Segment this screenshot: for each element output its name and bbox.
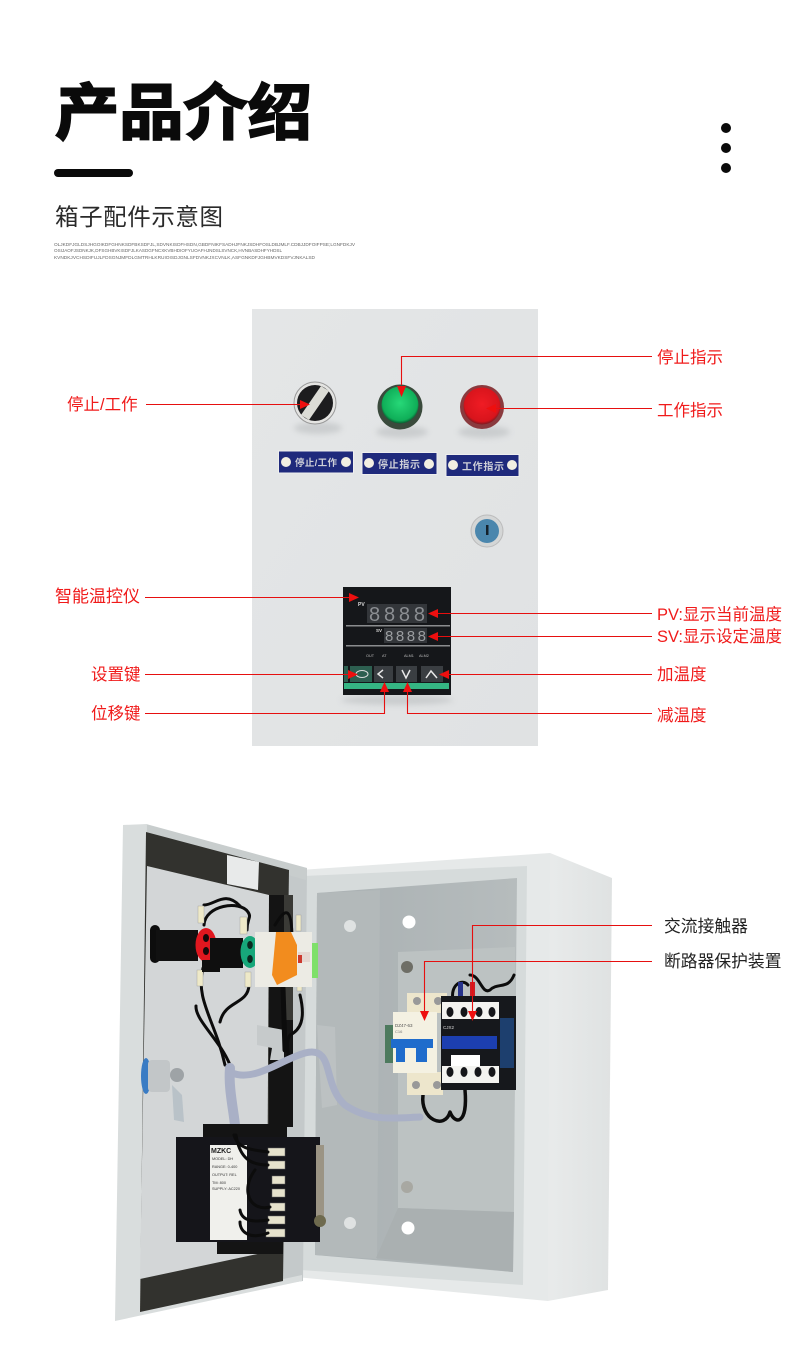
nameplate: work indicator: 工作指示	[462, 460, 504, 473]
temperature controller: ALM1	[404, 654, 414, 658]
cam lock	[141, 1058, 184, 1122]
circuit breaker	[385, 993, 447, 1095]
menu dots icon	[721, 123, 731, 173]
small placeholder text: OLJKDFJGLDSJHGOIKDFGHNKSDFBKSDFJL,SDVNKISDFHSDN,GBDFNIKFSADHJFNKJSDHFOSLDBJMLF.CDBJJDFOIFPSE;LGNFDKJV	[54, 242, 356, 247]
icon: selector switch	[294, 382, 336, 424]
label: set key: 设置键	[91, 665, 140, 684]
label: work indicator	[486, 401, 723, 420]
door bracket	[257, 1025, 284, 1060]
small placeholder text: OSIJAOFJSDNKJK,DFSGHBVKISDFJLKASDGFNCXKVBHDIOFYUOAFHJNDSLSVNCK,HVNBASDHFYHDSL	[54, 248, 282, 253]
nameplate: stop/work: 停止/工作	[295, 457, 337, 469]
label: decrease temperature	[403, 682, 706, 725]
wire sleeves	[197, 906, 302, 991]
label: circuit breaker	[420, 952, 781, 1021]
temperature controller: PV	[358, 602, 365, 608]
door black channel	[269, 895, 293, 1127]
temperature controller: SV	[376, 628, 382, 633]
panel: control panel front	[252, 309, 538, 746]
door gasket	[140, 832, 289, 1312]
label: AC contactor	[468, 917, 748, 1021]
icon: green indicator	[378, 384, 422, 430]
enclosure photo	[296, 853, 612, 1301]
icon: red indicator	[460, 385, 504, 429]
label: stop indicator: 停止指示	[657, 348, 723, 367]
label: SV: SV:显示设定温度	[657, 627, 782, 646]
box side	[523, 853, 612, 1301]
label: PV	[428, 605, 782, 624]
label: work indicator: 工作指示	[657, 401, 723, 420]
label: decrease temperature: 减温度	[657, 706, 706, 725]
tape patch	[227, 855, 259, 890]
subtitle: 箱子配件示意图	[55, 204, 223, 230]
label: smart controller	[55, 587, 359, 606]
door rim backing	[282, 866, 307, 1284]
door inner plate	[140, 866, 269, 1279]
small placeholder text: KVNDKJVCHSDIFUJLFDSGNJMFDLGMTRHLKRUIOISDJGNLSFDVNKJXCVNLK,ASFGNKDFJGHBMVKDSFVJNKALSD	[54, 255, 316, 260]
rear controller unit: MODEL: DH	[212, 1157, 233, 1161]
terminals	[266, 1148, 285, 1237]
label: circuit breaker: 断路器保护装置	[664, 952, 781, 971]
small placeholder text	[54, 242, 356, 260]
label: stop/work	[67, 395, 310, 414]
label: increase temperature	[439, 665, 706, 684]
rear controller unit: OUTPUT: REL	[212, 1173, 237, 1177]
temperature controller	[343, 587, 451, 695]
circuit breaker: C16	[395, 1029, 403, 1034]
controller buttons	[344, 666, 443, 682]
pilot lamps	[150, 925, 260, 972]
temperature controller: OUT	[366, 654, 375, 658]
wires at contactor	[423, 975, 514, 1121]
rear controller unit: TM: 800	[212, 1181, 226, 1185]
label: shift key	[91, 682, 389, 723]
nameplate: stop/work	[278, 451, 354, 473]
temperature controller: AT	[382, 654, 387, 658]
rear controller unit	[176, 1124, 326, 1254]
label: PV: PV:显示当前温度	[657, 605, 782, 624]
box front frame	[296, 853, 550, 1301]
mounting holes and bolts	[344, 916, 416, 1234]
PV display: 8888	[369, 604, 425, 626]
label: stop indicator	[397, 348, 723, 397]
contactor	[441, 996, 516, 1090]
rear controller unit: SUPPLY: AC220	[212, 1187, 240, 1191]
nameplate: work indicator	[446, 454, 519, 476]
label: smart controller: 智能温控仪	[55, 587, 140, 606]
label: stop/work: 停止/工作	[67, 395, 138, 414]
title underline bar	[54, 169, 133, 177]
nameplate: stop indicator: 停止指示	[378, 458, 420, 471]
label: AC contactor: 交流接触器	[664, 917, 748, 936]
spiral cable wrap	[230, 1052, 420, 1240]
relay module	[255, 932, 318, 987]
door wiring	[196, 899, 302, 1065]
nameplate: stop indicator	[362, 452, 437, 474]
rear controller unit: RANGE: 0-400	[212, 1165, 237, 1169]
SV display: 8888	[385, 628, 426, 645]
circuit breaker: DZ47-63	[395, 1023, 413, 1028]
box interior	[315, 878, 517, 1272]
label: shift key: 位移键	[91, 704, 140, 723]
rear controller unit: MZKC	[211, 1148, 231, 1155]
temperature controller: ALM2	[419, 654, 429, 658]
label: SV	[428, 627, 782, 646]
icon: key lock	[471, 515, 503, 547]
label: set key	[91, 665, 358, 684]
label: increase temperature: 加温度	[657, 665, 706, 684]
title: 产品介绍	[55, 79, 312, 147]
door	[115, 824, 337, 1321]
contactor: CJX2	[443, 1025, 455, 1030]
